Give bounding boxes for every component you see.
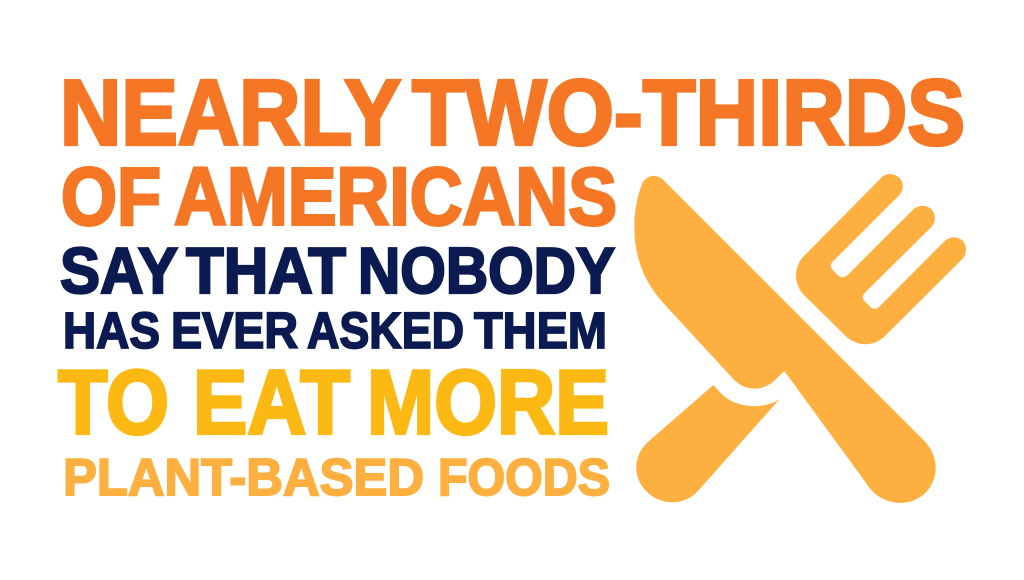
headline line 6: FOODS — [438, 449, 610, 507]
headline line 6: PLANT-BASED — [63, 449, 424, 507]
headline line 4 — [63, 302, 607, 359]
headline line 1: TWO-THIRDS — [412, 60, 965, 164]
headline line 4: EVER — [171, 302, 298, 359]
headline line 5: MORE — [367, 352, 609, 453]
icon: crossed knife and fork — [634, 174, 966, 503]
headline line 5 — [58, 352, 609, 453]
headline line 4: THEM — [474, 302, 607, 359]
headline line 4: ASKED — [307, 302, 464, 359]
headline line 2: AMERICANS — [174, 152, 617, 242]
headline line 6 — [63, 449, 610, 507]
headline line 3: NOBODY — [358, 234, 615, 307]
headline line 2: OF — [61, 152, 161, 242]
icon: fork head — [796, 174, 966, 344]
headline line 4: HAS — [63, 302, 160, 359]
headline line 3: SAY — [60, 234, 178, 307]
headline line 1 — [60, 60, 965, 164]
headline line 5: EAT — [193, 352, 350, 453]
headline line 5: TO — [58, 352, 169, 453]
headline line 3: THAT — [186, 234, 346, 307]
headline line 3 — [60, 234, 615, 307]
headline line 1: NEARLY — [60, 60, 401, 164]
icon: knife — [634, 176, 936, 503]
icon: fork handle — [636, 385, 779, 502]
